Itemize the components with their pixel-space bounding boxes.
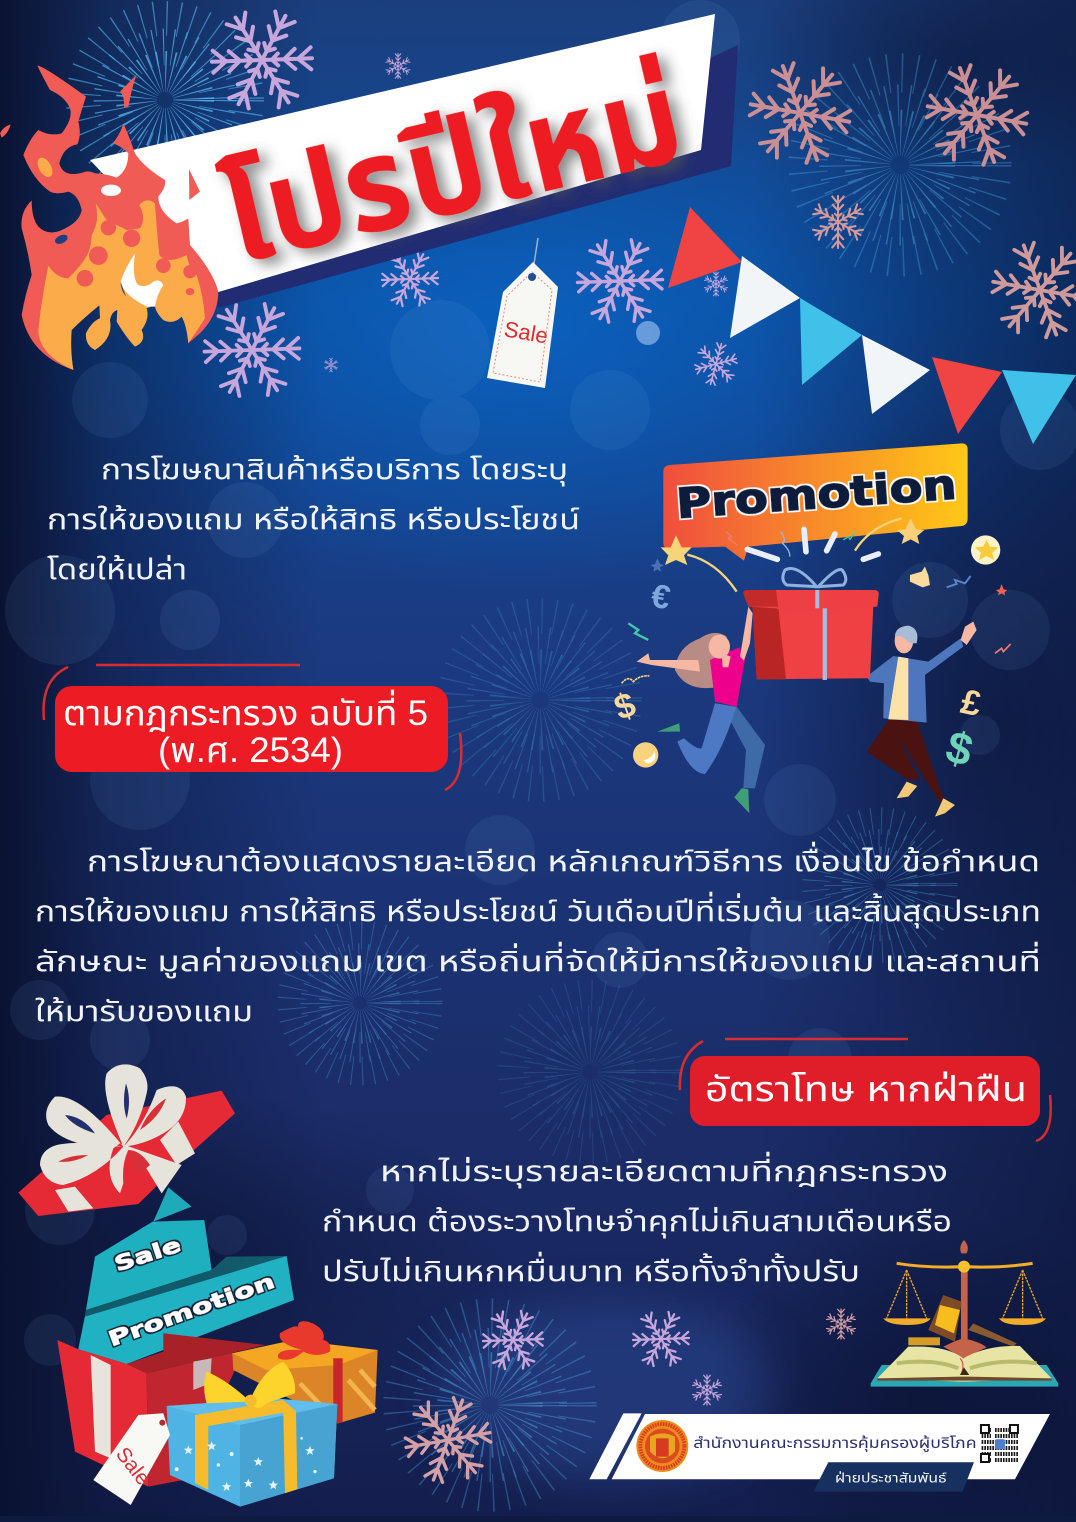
ribbon banners: Promotion [105, 1269, 278, 1351]
QR code [980, 1424, 1019, 1463]
orange box [232, 1321, 378, 1424]
blue box [167, 1362, 337, 1507]
penalty paragraph [322, 1151, 952, 1288]
bunting flags [668, 207, 1076, 444]
emblem [636, 1420, 688, 1472]
heading: ministerial regulation [44, 665, 461, 790]
heading: penalties [680, 1039, 1051, 1141]
speech bubble: Promotion [675, 461, 958, 528]
open lid with bow [18, 1064, 235, 1216]
intro paragraph: การโฆษณาสินค้าหรือบริการ โดยระบุ [101, 454, 568, 486]
sale tag [93, 1413, 170, 1505]
intro paragraph: การให้ของแถม หรือให้สิทธิ หรือประโยชน์ [47, 504, 580, 536]
gifts illustration [18, 1064, 378, 1507]
sale tag [487, 238, 558, 388]
department tag: ฝ่ายประชาสัมพันธ์ [835, 1470, 947, 1485]
intro paragraph: โดยให้เปล่า [47, 554, 187, 586]
sale tag: Sale [502, 316, 550, 349]
ribbon banners [78, 1187, 294, 1364]
details paragraph: ลักษณะ มูลค่าของแถม เขต หรือถิ่นที่จัดให้มีการให้ของแถม และสถานที่ [35, 941, 1041, 979]
gift box [743, 569, 879, 680]
penalty paragraph: หากไม่ระบุรายละเอียดตามที่กฎกระทรวง [380, 1151, 948, 1188]
confetti and stars [622, 518, 1011, 768]
title banner [90, 14, 738, 308]
sale tag: Sale [111, 1443, 155, 1490]
footer logo strip: สำนักงานคณะกรรมการคุ้มครองผู้บริโภค [693, 1435, 977, 1452]
scales of justice and book [871, 1240, 1058, 1387]
title: โปรปีใหม่ [209, 43, 696, 291]
heading: ministerial regulation: ตามกฎกระทรวง ฉบับที่ 5 [63, 689, 428, 733]
penalty paragraph: ปรับไม่เกินหกหมื่นบาท หรือทั้งจำทั้งปรับ [322, 1251, 860, 1288]
red box [57, 1333, 265, 1487]
man [867, 622, 977, 817]
penalty paragraph: กำหนด ต้องระวางโทษจำคุกไม่เกินสามเดือนหรือ [322, 1206, 952, 1238]
heading: ministerial regulation: (พ.ศ. 2534) [158, 731, 343, 770]
ribbon banners: Sale [111, 1232, 184, 1276]
details paragraph: การโฆษณาต้องแสดงรายละเอียด หลักเกณฑ์วิธีการ เงื่อนไข ข้อกำหนด [87, 841, 1040, 878]
details paragraph: การให้ของแถม การให้สิทธิ หรือประโยชน์ วันเดือนปีที่เริ่มต้น และสิ้นสุดประเภท [35, 891, 1041, 928]
currency symbols: £ [957, 682, 985, 724]
details paragraph [35, 841, 1041, 1028]
currency symbols: € [648, 578, 673, 617]
woman [637, 607, 765, 813]
currency symbols: $ [609, 685, 641, 728]
currency symbols: $ [941, 721, 978, 776]
footer logo strip [589, 1413, 1050, 1492]
details paragraph: ให้มารับของแถม [35, 996, 253, 1028]
heading: penalties: อัตราโทษ หากฝ่าฝืน [705, 1070, 1027, 1109]
intro paragraph [47, 454, 580, 586]
department tag [813, 1462, 974, 1492]
icon: flame [0, 66, 218, 370]
currency symbols [609, 578, 985, 776]
promotion illustration [609, 443, 1011, 817]
speech bubble [663, 443, 968, 561]
